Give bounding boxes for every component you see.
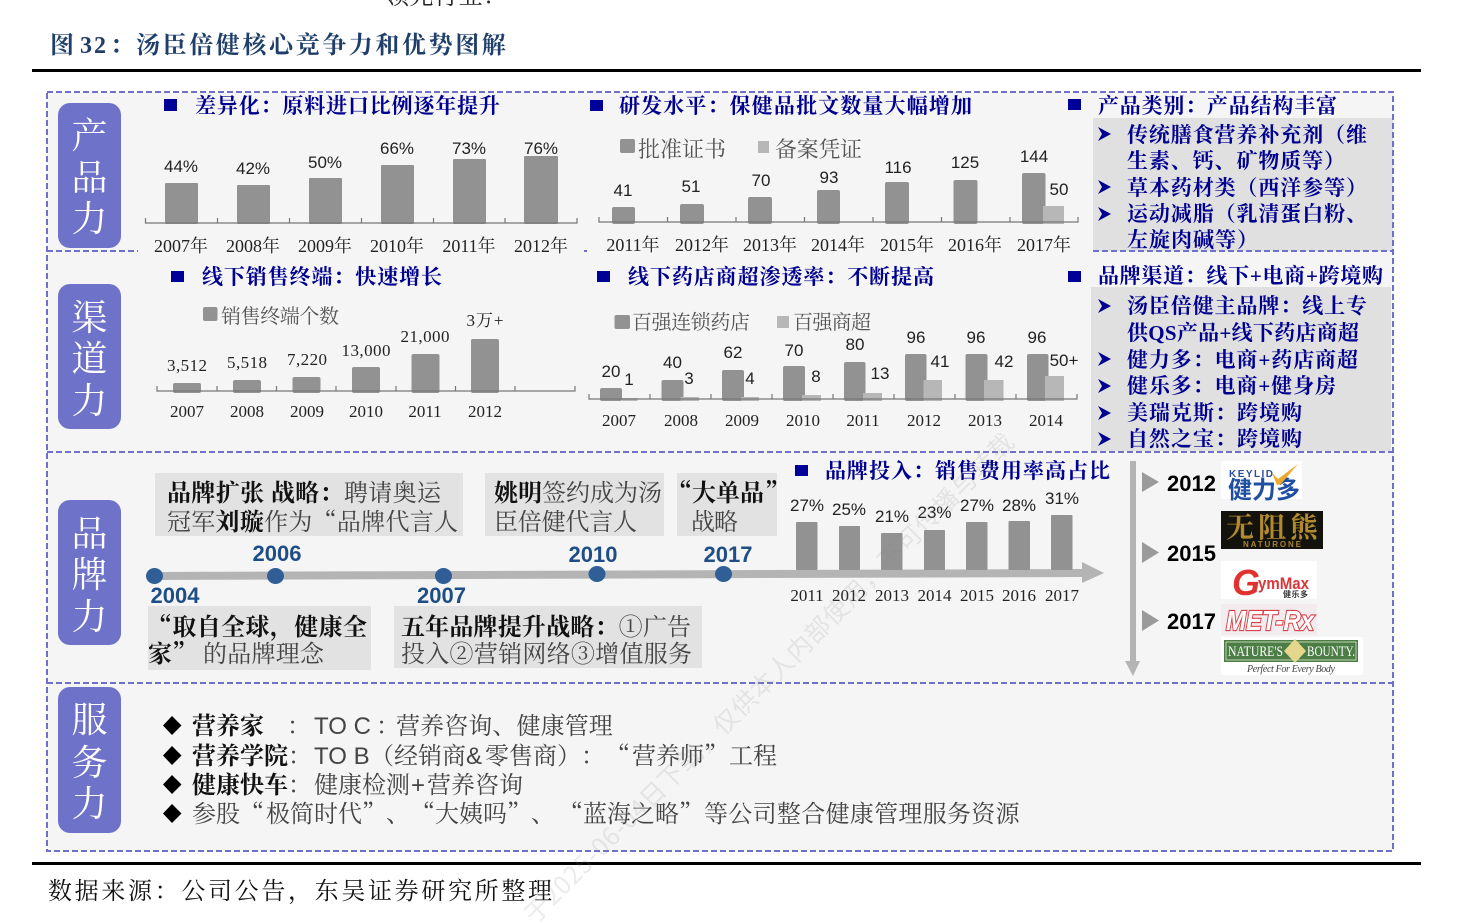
bar chart: health product approvals: 2014年 — [811, 234, 865, 255]
bar chart: imported raw material ratio: 50% — [308, 153, 342, 172]
panel: brand strength — [58, 459, 1363, 676]
logo: MET-Rx: MET-Rx — [1226, 605, 1315, 636]
logo: Nature's Bounty: Perfect For Every Body — [1246, 664, 1336, 675]
bar chart: sales terminals: 销售终端个数 — [221, 305, 339, 328]
badge: service strength: 务 — [71, 735, 108, 786]
text block: service items: ” — [362, 794, 386, 829]
list: product categories: 草本药材类（西洋参等） — [1127, 176, 1367, 200]
badge: product strength: 力 — [71, 191, 108, 242]
title: 汤臣倍健核心竞争力和优势图解 — [136, 31, 508, 59]
callout: 2017 big single product — [668, 473, 789, 537]
text block: service items: ： — [376, 706, 400, 741]
callout: 2006 brand expansion: 品牌扩张 战略：聘请奥运 — [167, 473, 442, 508]
list: brand channels — [1098, 294, 1367, 451]
panel: channel strength — [58, 264, 1391, 451]
bar chart: selling expense ratio: 28% — [1002, 496, 1036, 515]
logo: Nature's Bounty — [1221, 637, 1363, 675]
bar chart: health product approvals: 2011年 — [606, 234, 660, 255]
text block: service items: ” — [679, 794, 703, 829]
callout: 2006 brand expansion: 冠军刘璇作为“品牌代言人 — [167, 502, 458, 537]
bar chart: imported raw material ratio: 2010年 — [370, 235, 424, 256]
bar chart: selling expense ratio: 21% — [875, 507, 909, 526]
callout: 2017 big single product: 大单品 — [692, 473, 764, 508]
text block: service items: 健康检测 — [314, 765, 410, 800]
bar chart: health product approvals: 2017年 — [1017, 234, 1071, 255]
bar chart: penetration rate: 2011 — [846, 411, 880, 430]
text block: service items: “ — [606, 736, 630, 771]
bar chart: sales terminals: 7,220 — [287, 350, 327, 369]
bar chart: imported raw material ratio: 2007年 — [154, 235, 208, 256]
text block: service items: 工程 — [729, 736, 777, 771]
timeline years: 2006 — [253, 541, 301, 566]
bar chart: health product approvals: 125 — [951, 153, 979, 172]
list background: product categories — [1093, 118, 1393, 251]
list: product categories: 运动减脂（乳清蛋白粉、 — [1127, 202, 1367, 226]
bar chart: penetration rate: 50+ — [1050, 351, 1078, 370]
logo: GymMax: ymMax — [1258, 574, 1309, 593]
bar chart: selling expense ratio: 2013 — [875, 586, 909, 605]
bar chart: health product approvals: 2015年 — [880, 234, 934, 255]
text block: service items: 、 — [531, 794, 555, 829]
callout: 2004 brand concept — [148, 606, 371, 670]
main panel background — [47, 92, 1393, 851]
list: product categories: 左旋肉碱等） — [1127, 228, 1258, 252]
timeline nodes — [146, 566, 732, 584]
badge: channel strength — [58, 284, 121, 429]
bar chart: penetration rate: 2007 — [602, 411, 636, 430]
callout: 2017 big single product: “ — [668, 473, 692, 508]
list: brand channels: 自然之宝：跨境购 — [1127, 427, 1302, 451]
list background: brand channels — [1091, 287, 1391, 451]
timeline years: 2017 — [704, 542, 752, 567]
bar chart: penetration rate: 20 — [602, 362, 620, 381]
bar chart: health product approvals: 93 — [820, 168, 838, 187]
text block: service items: ： — [581, 736, 605, 771]
text block: service items: 营养学院 — [192, 736, 288, 771]
bar chart: selling expense ratio: 27% — [790, 496, 824, 515]
bar chart: imported raw material ratio: 2012年 — [514, 235, 568, 256]
bar chart: imported raw material ratio: 2009年 — [298, 235, 352, 256]
bar chart: sales terminals: 2008 — [230, 402, 264, 421]
bar chart: penetration rate: 96 — [1028, 328, 1046, 347]
bar chart: selling expense ratio: 2012 — [832, 586, 866, 605]
text block: service items: 营养师 — [632, 736, 704, 771]
bar chart: health product approvals: 50 — [1050, 180, 1068, 199]
badge: channel strength: 渠 — [71, 290, 108, 341]
bar chart: imported raw material ratio: 42% — [236, 159, 270, 178]
list: brand channels: 汤臣倍健主品牌：线上专 — [1127, 294, 1367, 318]
badge: brand strength: 品 — [71, 506, 108, 557]
callout: 2010 Yao Ming: 姚明签约成为汤 — [494, 473, 662, 508]
list: brand channels: 健力多：电商+药店商超 — [1127, 348, 1358, 372]
callout: 2017 big single product: 战略 — [691, 502, 738, 537]
text block: service items: 健康快车 — [192, 765, 288, 800]
bar chart: imported raw material ratio: 76% — [524, 139, 558, 158]
bar chart: sales terminals: 2007 — [170, 402, 204, 421]
year marker 2017: 2017 — [1167, 609, 1216, 634]
bar chart: health product approvals: 116 — [884, 158, 912, 177]
bar chart: penetration rate: 2008 — [664, 411, 698, 430]
list: product categories — [1098, 123, 1367, 252]
text block: service items: “ — [559, 794, 583, 829]
text block: service items: TO C — [314, 713, 371, 740]
logo: GymMax — [1221, 561, 1317, 603]
bar chart: sales terminals — [157, 305, 575, 421]
bar chart: penetration rate: 2013 — [968, 411, 1002, 430]
heading: pharmacy and supermarket penetration: 线下药店商超渗透率：不断提高 — [628, 265, 934, 289]
bar chart: sales terminals: 2012 — [468, 402, 502, 421]
logo: GymMax: 健乐多 — [1283, 589, 1308, 600]
text block: service items: 大姨吗 — [435, 794, 507, 829]
text block: service items: & — [466, 743, 482, 770]
timeline arrow — [155, 562, 1104, 583]
timeline years: 2010 — [569, 542, 617, 567]
bar chart: imported raw material ratio: 2008年 — [226, 235, 280, 256]
bar chart: health product approvals: 51 — [682, 177, 700, 196]
bar chart: selling expense ratio: 25% — [832, 500, 866, 519]
timeline years — [151, 541, 752, 608]
panel: service strength — [58, 687, 1021, 833]
bar chart: penetration rate: 4 — [745, 369, 755, 388]
bar chart: penetration rate: 2014 — [1029, 411, 1064, 430]
bar chart: selling expense ratio: 31% — [1045, 489, 1079, 508]
bar chart: penetration rate — [589, 311, 1078, 430]
bar chart: selling expense ratio — [790, 489, 1080, 605]
text block: service items: 营养咨询、健康管理 — [396, 706, 613, 741]
heading: product categories: 产品类别：产品结构丰富 — [1098, 94, 1337, 118]
bar chart: selling expense ratio: 23% — [917, 503, 952, 522]
bar chart: health product approvals — [599, 137, 1078, 255]
year marker 2012 — [1142, 471, 1216, 496]
bar chart: imported raw material ratio — [146, 139, 577, 256]
bar chart: penetration rate: 62 — [724, 343, 742, 362]
bar chart: selling expense ratio: 2017 — [1045, 586, 1080, 605]
callout: 2004 brand concept: “取自全球，健康全 — [148, 607, 367, 642]
badge: brand strength — [58, 500, 121, 645]
bar chart: penetration rate: 2012 — [907, 411, 941, 430]
logo: Naturone: 无阻熊 — [1226, 506, 1320, 546]
callout: 2010 Yao Ming: 臣倍健代言人 — [494, 502, 637, 537]
list: brand channels: 健乐多：电商+健身房 — [1127, 374, 1336, 398]
text block: service items: 零售商 — [485, 736, 557, 771]
dashed panel frame — [47, 92, 1393, 851]
badge: product strength: 产 — [71, 108, 108, 159]
bar chart: health product approvals: 70 — [752, 171, 770, 190]
text block: service items: 极简时代 — [266, 794, 362, 829]
heading: brand investment: 品牌投入：销售费用率高占比 — [825, 459, 1110, 483]
bar chart: penetration rate: 80 — [846, 335, 864, 354]
callout: 2010 Yao Ming — [485, 473, 664, 537]
bar chart: penetration rate: 2009 — [725, 411, 759, 430]
bar chart: penetration rate: 41 — [931, 352, 949, 371]
callout: 2017 big single product: ” — [765, 473, 789, 508]
callout: 2007 five-year brand plan: 五年品牌提升战略：①广告 — [401, 607, 691, 642]
bar chart: sales terminals: 3,512 — [167, 356, 207, 375]
text block: service items: 、 — [386, 794, 410, 829]
title: ： — [110, 33, 134, 59]
text block: service items — [163, 706, 1021, 829]
bar chart: selling expense ratio: 27% — [960, 496, 994, 515]
text block: service items: ： — [288, 765, 312, 800]
bar chart: health product approvals: 41 — [614, 181, 632, 200]
text block: service items: 参股“ — [192, 794, 264, 829]
badge: product strength: 品 — [71, 150, 108, 201]
bar chart: penetration rate: 96 — [907, 328, 925, 347]
bar chart: imported raw material ratio: 44% — [164, 157, 198, 176]
bar chart: penetration rate: 13 — [871, 364, 889, 383]
bar chart: penetration rate: 70 — [785, 341, 803, 360]
text block: service items: ： — [288, 736, 312, 771]
bar chart: sales terminals: 2011 — [408, 402, 442, 421]
list: brand channels: 美瑞克斯：跨境购 — [1127, 401, 1302, 425]
bar chart: penetration rate: 40 — [663, 353, 682, 372]
logo: Keylid: KEYLID — [1229, 469, 1273, 480]
source note: 数据来源：公司公告，东吴证券研究所整理 — [48, 878, 552, 905]
callout: 2007 five-year brand plan: 投入②营销网络③增值服务 — [401, 634, 692, 669]
bar chart: penetration rate: 2010 — [786, 411, 820, 430]
bar chart: penetration rate: 百强连锁药店 — [632, 311, 750, 334]
text block: service items: “ — [411, 794, 435, 829]
badge: brand strength: 力 — [71, 589, 108, 640]
callout: 2007 five-year brand plan — [394, 606, 702, 669]
bar chart: sales terminals: 5,518 — [227, 353, 267, 372]
text block: service items: ： — [287, 706, 311, 741]
bar chart: sales terminals: 3万+ — [466, 311, 504, 330]
badge: channel strength: 道 — [71, 331, 108, 382]
text block: service items: 营养家 — [192, 706, 264, 741]
text block: service items: 等公司整合健康管理服务资源 — [704, 794, 1021, 829]
bar chart: sales terminals: 13,000 — [342, 341, 390, 360]
timeline years: 2004 — [151, 583, 200, 608]
text block: service items: （ — [370, 736, 394, 771]
year marker 2015 — [1142, 541, 1216, 566]
text block: service items: 经销商 — [394, 736, 466, 771]
text block: service items: 营养咨询 — [427, 765, 523, 800]
logo: Naturone: NATURONE — [1243, 540, 1302, 549]
panel: product strength — [58, 94, 1393, 256]
bar chart: selling expense ratio: 2014 — [918, 586, 952, 605]
bar chart: selling expense ratio: 2016 — [1002, 586, 1036, 605]
year marker 2012: 2012 — [1167, 471, 1216, 496]
text block: service items: ” — [704, 736, 728, 771]
badge: product strength — [58, 103, 121, 248]
bar chart: sales terminals: 2009 — [290, 402, 324, 421]
bar chart: imported raw material ratio: 66% — [380, 139, 414, 158]
bar chart: penetration rate: 8 — [811, 367, 821, 386]
badge: brand strength: 牌 — [71, 547, 108, 598]
badge: service strength: 服 — [71, 692, 108, 743]
bar chart: health product approvals: 2013年 — [743, 234, 797, 255]
bar chart: imported raw material ratio: 73% — [452, 139, 486, 158]
timeline years: 2007 — [417, 583, 466, 608]
text block: service items: ” — [507, 794, 531, 829]
bar chart: health product approvals: 2012年 — [675, 234, 729, 255]
logo: GymMax: G — [1232, 562, 1260, 603]
bar chart: health product approvals: 备案凭证 — [775, 137, 862, 162]
logo: Keylid: 健力多 — [1228, 470, 1300, 505]
title: 32 — [80, 33, 108, 59]
bar chart: sales terminals: 2010 — [349, 402, 383, 421]
badge: service strength — [58, 687, 121, 833]
bar chart: selling expense ratio: 2011 — [790, 586, 824, 605]
year marker 2017 — [1142, 609, 1216, 634]
bar chart: penetration rate: 3 — [684, 369, 694, 388]
bar chart: health product approvals: 批准证书 — [638, 137, 726, 162]
title: 图 — [50, 32, 74, 59]
text block: service items: TO B — [314, 743, 370, 770]
text block: service items: + — [411, 772, 425, 799]
bar chart: sales terminals: 21,000 — [400, 327, 450, 346]
heading: brand channels: 品牌渠道：线下+电商+跨境购 — [1098, 264, 1383, 288]
text block: service items: 蓝海之略 — [583, 794, 679, 829]
heading: differentiation: 差异化：原料进口比例逐年提升 — [195, 94, 500, 118]
bar chart: penetration rate: 百强商超 — [793, 311, 871, 334]
list: product categories: 生素、钙、矿物质等） — [1127, 149, 1345, 173]
vertical timeline arrow — [1125, 461, 1140, 676]
badge: service strength: 力 — [71, 776, 108, 827]
bar chart: health product approvals: 2016年 — [948, 234, 1002, 255]
bar chart: penetration rate: 96 — [967, 328, 985, 347]
callout: 2006 brand expansion — [155, 473, 463, 537]
logo: Nature's Bounty: BOUNTY. — [1307, 644, 1355, 660]
heading: offline sales terminals: 线下销售终端：快速增长 — [202, 265, 442, 289]
watermark: 于2025-06-04日下载，仅供本人内部使用，不可传播与转载 — [515, 424, 1021, 923]
list: brand channels: 供QS产品+线下药店商超 — [1127, 321, 1359, 345]
year marker 2015: 2015 — [1167, 541, 1216, 566]
list: product categories: 传统膳食营养补充剂（维 — [1127, 123, 1367, 147]
badge: channel strength: 力 — [71, 373, 108, 424]
bar chart: selling expense ratio: 2015 — [960, 586, 994, 605]
bar chart: imported raw material ratio: 2011年 — [442, 235, 496, 256]
bar chart: health product approvals: 144 — [1020, 147, 1048, 166]
callout: 2004 brand concept: 家” 的品牌理念 — [148, 634, 325, 669]
text block: service items: ） — [557, 736, 581, 771]
bar chart: penetration rate: 42 — [995, 352, 1013, 371]
logo: Nature's Bounty: NATURE'S — [1228, 644, 1283, 660]
bar chart: penetration rate: 1 — [624, 370, 634, 389]
heading: R&D level: 研发水平：保健品批文数量大幅增加 — [619, 94, 972, 118]
